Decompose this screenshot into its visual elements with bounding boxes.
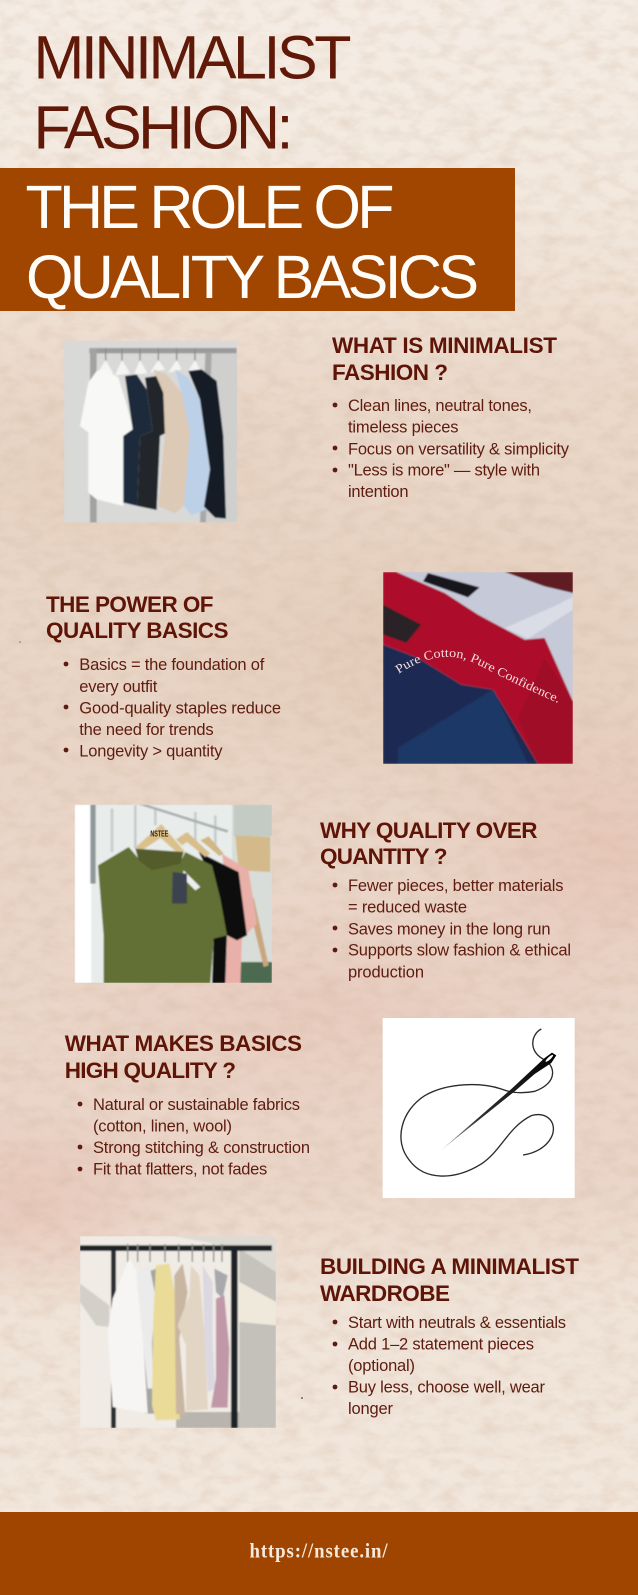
heading: THE POWER OF bbox=[46, 592, 214, 617]
banner: The Role of Quality Basics: QUALITY BASICS bbox=[26, 243, 479, 311]
photo: garments on a black rack bbox=[80, 1236, 276, 1428]
heading: WARDROBE bbox=[320, 1281, 450, 1306]
bullet list: (cotton, linen, wool) bbox=[93, 1117, 232, 1135]
bullet list bbox=[78, 1096, 310, 1179]
bullet list: intention bbox=[348, 483, 408, 501]
bullet list: production bbox=[348, 963, 424, 981]
bullet list: Good-quality staples reduce bbox=[79, 699, 281, 717]
heading: HIGH QUALITY ? bbox=[65, 1058, 236, 1083]
bullet list: the need for trends bbox=[79, 721, 214, 739]
heading: WHY QUALITY OVER bbox=[320, 818, 538, 843]
footer bar with url bbox=[0, 1512, 638, 1595]
title: Minimalist Fashion: MINIMALIST bbox=[34, 24, 352, 92]
section: why quality over quantity bbox=[320, 818, 571, 981]
bullet list: Longevity > quantity bbox=[79, 743, 223, 761]
bullet list: Fit that flatters, not fades bbox=[93, 1161, 267, 1179]
bullet list: Add 1–2 statement pieces bbox=[348, 1336, 534, 1354]
bullet list: timeless pieces bbox=[348, 419, 458, 437]
section: what makes basics high quality bbox=[65, 1031, 310, 1179]
heading: QUALITY BASICS bbox=[46, 618, 228, 643]
section: the power of quality basics bbox=[46, 592, 281, 761]
photo caption: Pure Cotton, Pure Confidence. bbox=[394, 650, 558, 703]
heading bbox=[65, 1031, 302, 1083]
bullet list: "Less is more" — style with bbox=[348, 462, 540, 480]
title: Minimalist Fashion bbox=[34, 24, 352, 162]
bullet list: Clean lines, neutral tones, bbox=[348, 397, 532, 415]
heading: QUANTITY ? bbox=[320, 844, 448, 869]
hanger logo: NSTEE bbox=[150, 829, 169, 838]
bullet list: Saves money in the long run bbox=[348, 920, 550, 938]
bullet list: longer bbox=[348, 1400, 394, 1418]
title: Minimalist Fashion: FASHION: bbox=[34, 94, 294, 162]
section: what is minimalist fashion bbox=[332, 333, 570, 501]
heading: FASHION ? bbox=[332, 360, 448, 385]
section: building a minimalist wardrobe bbox=[320, 1254, 579, 1418]
banner: The Role of Quality Basics: THE ROLE OF bbox=[26, 173, 394, 241]
bullet list: = reduced waste bbox=[348, 899, 467, 917]
bullet list: Buy less, choose well, wear bbox=[348, 1379, 546, 1397]
bullet list: every outfit bbox=[79, 678, 158, 696]
photo: olive t-shirt on wooden hangers bbox=[75, 805, 272, 983]
bullet list: Start with neutrals & essentials bbox=[348, 1314, 566, 1332]
bullet list: Strong stitching & construction bbox=[93, 1139, 310, 1157]
heading bbox=[320, 818, 538, 869]
needle bbox=[441, 1053, 556, 1150]
heading: WHAT IS MINIMALIST bbox=[332, 333, 557, 358]
bullet list: Natural or sustainable fabrics bbox=[93, 1096, 300, 1114]
heading bbox=[46, 592, 228, 643]
heading: WHAT MAKES BASICS bbox=[65, 1031, 302, 1056]
bullet list: Supports slow fashion & ethical bbox=[348, 942, 571, 960]
footer bar with url: https://nstee.in/ bbox=[250, 1538, 389, 1562]
bullet list: (optional) bbox=[348, 1357, 415, 1375]
bullet list bbox=[64, 656, 281, 761]
photo: needle and thread bbox=[383, 1018, 575, 1198]
heading bbox=[320, 1254, 579, 1306]
bullet list bbox=[333, 397, 570, 501]
bullet list: Fewer pieces, better materials bbox=[348, 877, 564, 895]
bullet list bbox=[333, 877, 571, 981]
photo: folded t-shirts, pure cotton bbox=[383, 572, 573, 764]
heading: BUILDING A MINIMALIST bbox=[320, 1254, 579, 1279]
bullet list: Focus on versatility & simplicity bbox=[348, 440, 570, 458]
bullet list bbox=[333, 1314, 566, 1418]
photo: clothes on a grey rack bbox=[64, 341, 237, 523]
heading bbox=[332, 333, 557, 385]
bullet list: Basics = the foundation of bbox=[79, 656, 265, 674]
thread bbox=[401, 1029, 553, 1176]
banner: The Role of Quality Basics bbox=[0, 168, 515, 311]
